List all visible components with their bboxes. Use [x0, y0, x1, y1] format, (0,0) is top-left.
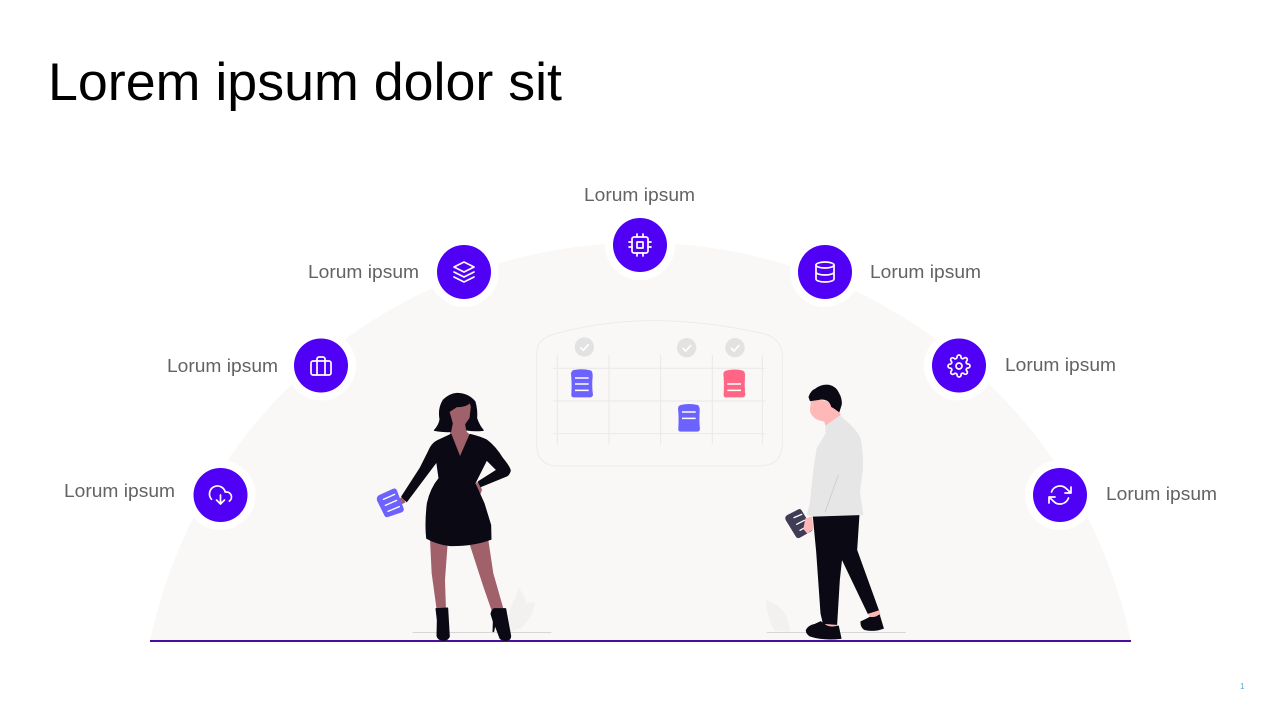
- node: briefcase: [167, 330, 356, 400]
- calendar grid: [553, 355, 766, 444]
- node: download: [64, 460, 256, 530]
- semicircle background: [150, 243, 1131, 641]
- badge: [294, 338, 348, 392]
- phone: [785, 509, 812, 538]
- man illustration: [766, 385, 906, 639]
- icon: refresh: [1049, 486, 1071, 504]
- legs: [430, 539, 504, 611]
- node: settings: [924, 330, 1116, 400]
- ankles: [824, 610, 881, 628]
- halo: [1025, 460, 1095, 530]
- hand: [803, 516, 813, 534]
- shirt: [807, 415, 863, 517]
- label: Lorum ipsum: [1106, 484, 1217, 504]
- halo: [605, 210, 675, 280]
- badge: [932, 338, 986, 392]
- title: Lorem ipsum dolor sit: [48, 53, 562, 112]
- badge: [194, 468, 248, 522]
- purple note with two lines: [678, 404, 700, 432]
- ground line: [413, 631, 551, 634]
- woman illustration: [377, 393, 551, 640]
- calendar illustration: [537, 321, 782, 466]
- ground line: [767, 631, 906, 634]
- label: Lorum ipsum: [584, 185, 695, 205]
- dress: [402, 434, 510, 546]
- pants: [813, 514, 878, 624]
- label: Lorum ipsum: [1005, 355, 1116, 375]
- page number: 1: [1240, 682, 1245, 691]
- shirt fold: [825, 475, 838, 512]
- halo: [186, 460, 256, 530]
- icon: gear: [948, 355, 970, 377]
- icon: cpu: [629, 234, 651, 256]
- halo: [924, 330, 994, 400]
- hair: [809, 385, 841, 412]
- boots: [436, 608, 511, 640]
- label: Lorum ipsum: [870, 262, 981, 282]
- plant: [509, 587, 535, 632]
- head skin: [810, 398, 841, 426]
- icon: database: [816, 262, 834, 282]
- halo: [286, 330, 356, 400]
- badge: [1033, 468, 1087, 522]
- halo: [429, 237, 499, 307]
- node: cpu: [584, 185, 695, 280]
- label: Lorum ipsum: [308, 262, 419, 282]
- calendar outline: [537, 321, 782, 466]
- hands, neck and face: [399, 402, 482, 505]
- icon: cloud download: [209, 486, 232, 504]
- label: Lorum ipsum: [64, 481, 175, 501]
- red note with two lines: [723, 369, 745, 397]
- icon: briefcase: [311, 357, 331, 375]
- badge: [798, 245, 852, 299]
- icon: layers: [454, 262, 474, 282]
- node: database: [790, 237, 981, 307]
- shoes: [806, 615, 883, 639]
- check badges: [575, 337, 745, 357]
- purple note with three lines: [571, 369, 593, 397]
- hair: [434, 393, 483, 432]
- halo: [790, 237, 860, 307]
- badge: [613, 218, 667, 272]
- badge: [437, 245, 491, 299]
- node: layers: [308, 237, 499, 307]
- node: refresh: [1025, 460, 1217, 530]
- label: Lorum ipsum: [167, 356, 278, 376]
- plant: [766, 600, 790, 632]
- baseline: [150, 640, 1131, 642]
- paper held by woman: [377, 489, 404, 517]
